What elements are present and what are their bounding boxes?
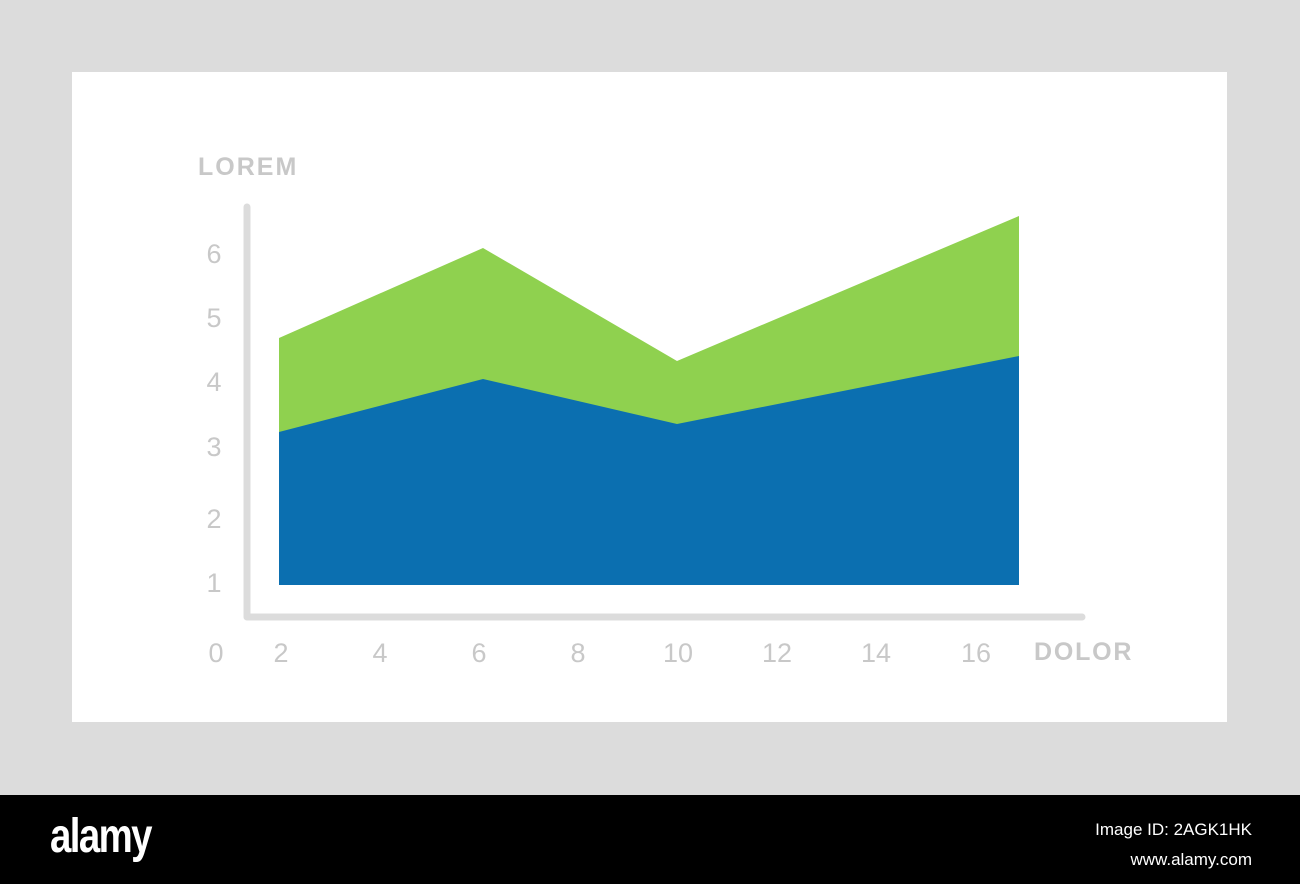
image id: Image ID: 2AGK1HK [1095, 820, 1252, 839]
y axis labels: 5 [206, 303, 222, 333]
y axis labels [206, 239, 224, 668]
image id [1095, 820, 1252, 869]
x axis labels: 12 [762, 638, 792, 668]
area: green series [279, 216, 1019, 585]
y axis labels: 0 [208, 638, 224, 668]
x axis labels: 10 [663, 638, 693, 668]
y axis labels: 1 [206, 568, 222, 598]
logo text: alamy [50, 810, 151, 863]
x axis labels [273, 638, 991, 668]
area: blue series [279, 356, 1019, 585]
x axis labels: 2 [273, 638, 289, 668]
image id: www.alamy.com [1130, 850, 1252, 869]
x axis labels: 14 [861, 638, 891, 668]
x axis labels: 8 [570, 638, 586, 668]
x axis title: DOLOR [1034, 638, 1133, 666]
footer bar [0, 795, 1300, 884]
x axis labels: 6 [471, 638, 487, 668]
y axis labels: 6 [206, 239, 222, 269]
y axis labels: 2 [206, 504, 222, 534]
x axis labels: 4 [372, 638, 388, 668]
y axis title: LOREM [198, 153, 298, 181]
panel: chart card [72, 72, 1227, 722]
x axis labels: 16 [961, 638, 991, 668]
axes [247, 207, 1082, 617]
y axis labels: 3 [206, 432, 222, 462]
y axis labels: 4 [206, 367, 222, 397]
